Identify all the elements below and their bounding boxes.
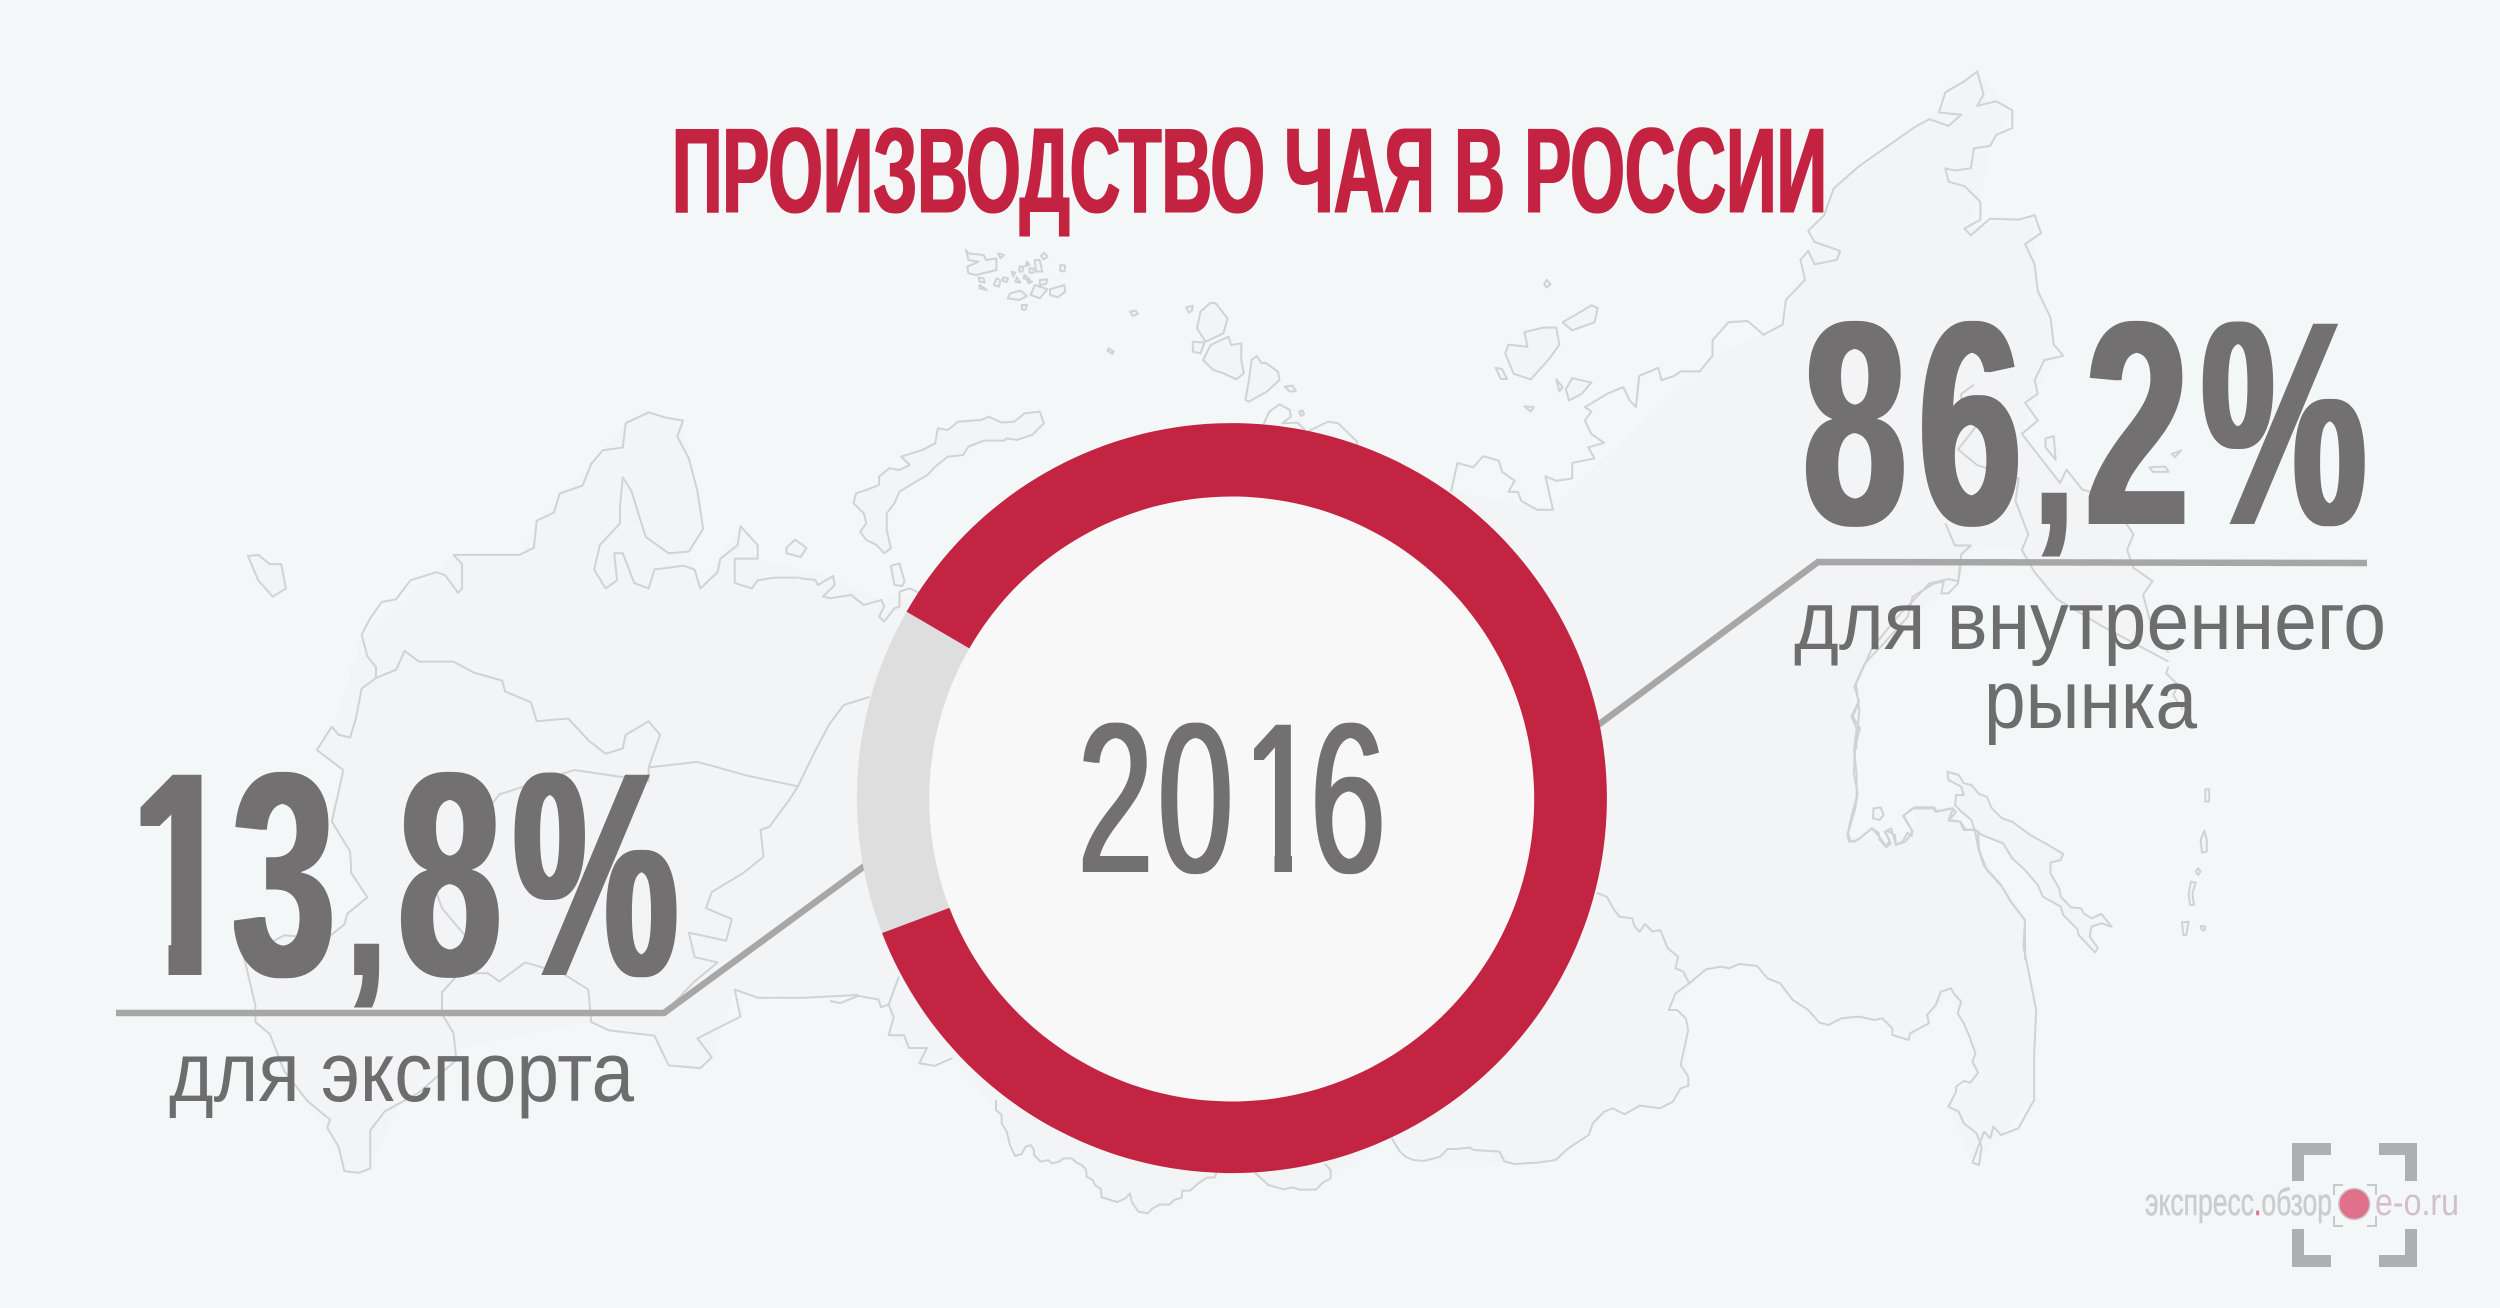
map south border — [996, 1100, 1471, 1213]
label: domestic market — [1794, 574, 2386, 746]
label: domestic market: для внутреннего — [1794, 574, 2386, 667]
stat: domestic share — [1803, 261, 2367, 586]
donut chart — [857, 423, 1607, 1173]
label: export: для экспорта — [169, 1025, 634, 1119]
logo corner brackets — [2298, 1149, 2411, 1261]
stat: domestic share: , — [2035, 335, 2073, 569]
donut segment: export 13.8% — [857, 612, 969, 933]
stat: export share — [140, 772, 677, 1008]
map north-east coast — [1451, 71, 2181, 750]
logo small brackets — [2334, 1185, 2376, 1226]
donut segment: domestic 86.2% — [882, 423, 1607, 1173]
callout line: export — [116, 862, 870, 1013]
logo wordmark: экспресс.обзор — [2145, 1182, 2332, 1224]
stat: domestic share: 8 — [1803, 261, 1907, 586]
stat: domestic share: 6 — [1918, 261, 2022, 586]
stat: export share: 3 — [232, 712, 336, 1037]
stat: export share: 1 — [131, 712, 234, 1037]
logo — [2145, 1149, 2459, 1261]
stat: export share: 8% — [398, 712, 678, 1037]
logo pink circle — [2339, 1188, 2370, 1220]
label: domestic market: рынка — [1984, 653, 2198, 746]
map of Russia — [244, 71, 2209, 1213]
callout line: domestic market — [1590, 562, 2367, 731]
map land fill — [244, 71, 2171, 1213]
stat: export share: , — [348, 786, 385, 1020]
stat: domestic share: 2% — [2085, 261, 2367, 586]
map arctic islands and north coast — [800, 250, 1357, 622]
logo domain: e-o.ru — [2375, 1182, 2459, 1224]
map south coast near ring — [830, 977, 952, 1066]
map far east and kamchatka — [1469, 700, 2112, 1165]
year label: 2016 — [1078, 678, 1385, 917]
donut centre — [928, 496, 1534, 1102]
map west section — [244, 412, 870, 1173]
map chukotka and okhotsk coast — [1848, 567, 2209, 960]
